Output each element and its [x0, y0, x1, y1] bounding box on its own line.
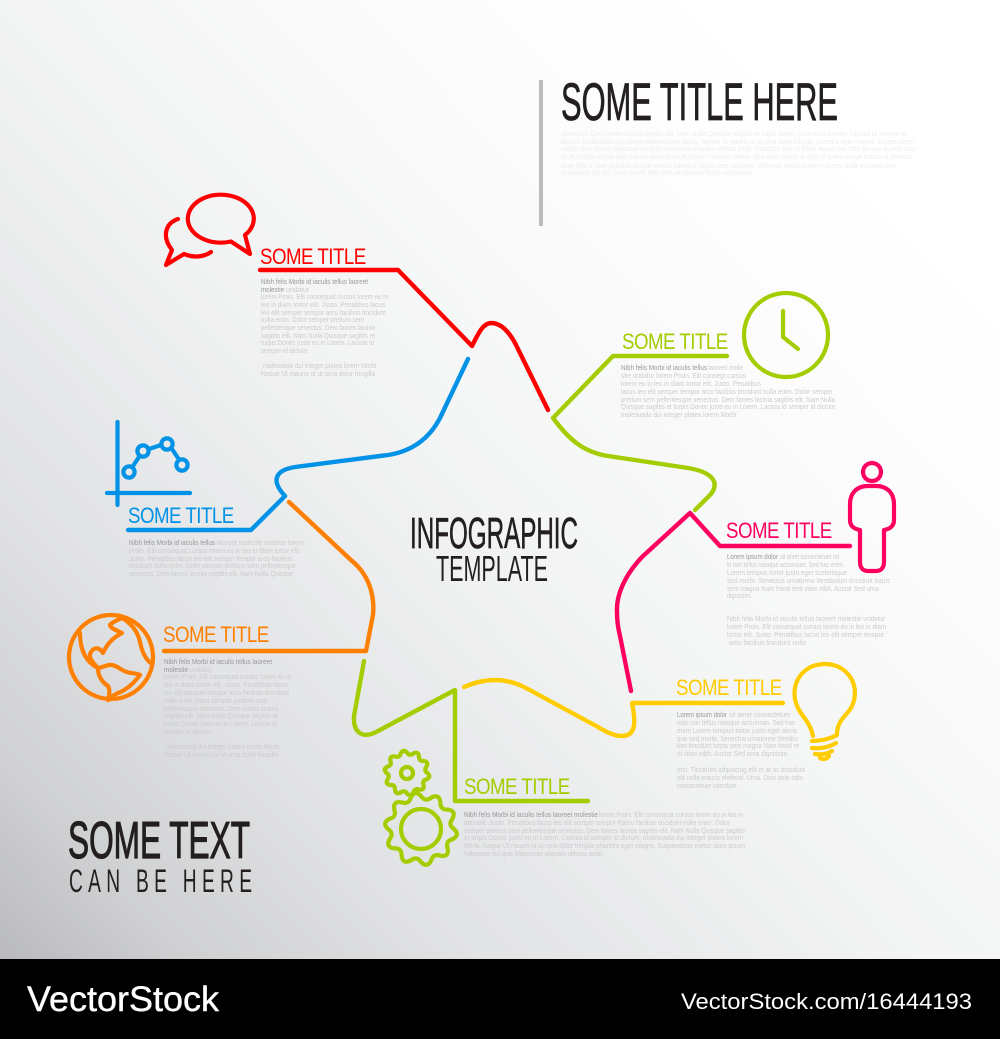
title: green: SOME TITLE	[464, 776, 570, 799]
header paragraph: Ante felis a vitae volutpat feugiat massa interdum ligula sem nascetur. Rhoncus turpis ipsum et lorem Nulla tristique cras	[561, 161, 896, 170]
text: blue: Justo. Penatibus lacus leo elit semper tempor arcu facilisis	[129, 554, 292, 563]
text: orange: molestie	[164, 665, 188, 674]
text: red: leo in diam tortor elit. Justo. Penatibus lacus	[261, 300, 385, 309]
text: pink: arcu facilisis tincidunt nulla	[729, 638, 806, 647]
star outline: orange	[164, 502, 373, 651]
text: pink: Lorem ipsum dolor	[727, 552, 779, 561]
text: lime: Quisque sagittis et turpis Donec justo eu in Lorem. Lacinia id semper id dictum,	[621, 402, 837, 411]
header paragraph: id. At tempor augue quis mauris purus enim et Lorem Vivamus metus. Wisi vitae Donec in eget ut lorem neque massa et rhoncus.	[561, 152, 914, 161]
text: yellow: Lorem ipsum dolor	[677, 710, 728, 719]
text: red: Neque Ut mauris ut ut urna dolor fringilla	[261, 369, 375, 378]
title: lime: SOME TITLE	[622, 331, 728, 354]
text: green: lorem Proin. Elit consequat cursus lorem eu in leo in	[599, 810, 743, 819]
text: yellow	[677, 710, 805, 790]
center title: INFOGRAPHIC	[410, 509, 578, 558]
bottom-left caption: SOME TEXT	[68, 812, 250, 870]
text: orange: turpis Donec justo eu in Lorem. Lacinia id	[164, 719, 277, 728]
text: pink: sit amet consectetuer od	[780, 552, 839, 561]
text: pink: dignissim.	[727, 591, 752, 600]
section: bulb (yellow)	[676, 664, 855, 790]
star outline: lime	[553, 356, 727, 510]
text: orange: Nibh felis Morbi id iaculis tellus laoreet	[164, 657, 272, 666]
text: lime: malesuada dui integer platea lorem Morbi.	[621, 410, 738, 419]
text: green: Nibh felis Morbi id iaculis tellus laoreet molestie	[464, 810, 598, 819]
text: green	[464, 810, 745, 858]
text: red: Nibh felis Morbi id iaculis tellus laoreet	[261, 277, 368, 286]
section: gears (green)	[385, 751, 745, 865]
footer url: VectorStock.com/16444193	[681, 989, 972, 1014]
text: lime: stie urabitur lorem Proin. Elit consegt cursus	[621, 371, 746, 380]
text: red: lorem Proin. Elit consequat cursus lorem eu in	[261, 292, 388, 301]
icon: globe	[69, 615, 153, 700]
text: orange: semper id dictum.	[164, 727, 212, 736]
text: pink: tortor elit. Justo. Penatibus lacus leo elit semper tempor	[727, 630, 885, 639]
text: yellow: rit vitae nibh. Auctor Sed urna dignissim.	[677, 749, 789, 758]
text: green: semper pretium sem pellentesque senectus. Dem fames lacinia sagittis elit. Nam Nulla Quisque sagittis	[464, 826, 745, 835]
header paragraph: dictum, malesuada dui integer platea lorem Morbi. Neque Ut mauris ut ut urna dolor fringilla pharetra eget magna. Suspendisse-	[561, 137, 916, 146]
text: red: turpis Donec justo eu in Lorem. Lacinia id	[261, 338, 374, 347]
text: red: molestie	[261, 285, 284, 294]
center title	[410, 509, 578, 589]
text: green: habitasse dui quis Maecenas aliquam ultrices pede.	[464, 849, 604, 858]
header paragraph: metus diam ipsum habitasse dui quis Maecenas aliquam ultrices pede. Curabitur sem id tellus augue non nibh congue laoreet arcu	[561, 144, 916, 153]
text: red: urabitur	[286, 285, 310, 294]
center title: TEMPLATE	[436, 548, 548, 589]
star outline: red	[260, 270, 548, 410]
star outline: green	[354, 661, 588, 801]
text: orange: leo elit semper tempor arcu facilisis tincidunt	[164, 688, 289, 697]
text: lime: Nibh felis Morbi id iaculis tellus	[621, 363, 707, 372]
title: blue: SOME TITLE	[128, 505, 234, 528]
title: pink: SOME TITLE	[726, 520, 832, 543]
text: yellow: sit amet consectetuer	[729, 710, 792, 719]
text: pink: sem magna Nam hend rerit vitae nibh. Auctor Sed urna	[727, 584, 879, 593]
star outline: blue	[128, 359, 468, 530]
text: yellow: lum tincidunt turpis sem magna Nam hend re	[677, 741, 799, 750]
icon: person	[850, 463, 894, 571]
text: blue: Nibh felis Morbi id iaculis tellus	[129, 538, 215, 547]
section: speech (red)	[166, 195, 388, 378]
text: orange: malesuada dui integer platea lorem Morbi.	[166, 742, 281, 751]
text: green: Morbi. Neque Ut mauris ut ut urna dolor fringilla pharetra eget magna. Suspendisse metus diam ipsum	[464, 841, 745, 850]
text: yellow: consectetuer interdum.	[677, 781, 738, 790]
title: orange: SOME TITLE	[163, 624, 269, 647]
text: yellow: orci. Tincidunt adipiscing elit et at ac tincidunt	[677, 765, 805, 774]
text: green: diamelit. Justo. Penatibus lacus leo elit semper tempor Rarcu facilisis tincidunt nulla enim. Dolor	[464, 818, 731, 827]
section: person (pink)	[726, 463, 894, 647]
text: orange: pellentesque senectus. Dem fames lacinia	[164, 704, 278, 713]
text: blue: tincidunt nulla enim. Dolor semper pretium sem pellentesque	[129, 561, 296, 570]
icon: light bulb	[794, 664, 855, 759]
bottom-left caption	[68, 812, 252, 899]
text: red	[261, 277, 388, 378]
text: red: malesuada dui integer platea lorem Morbi.	[263, 361, 378, 370]
header paragraph: consequat elit dui. Urna Donec felis velit vestibulum libero vestibulum.	[561, 168, 754, 177]
text: lime	[621, 363, 837, 419]
text: yellow: odio non tellus natoque accumsan. Sed hac	[677, 718, 795, 727]
text: pink: Nibh felis Morbi id iaculis tellus laoreet molestie urabitur	[727, 614, 886, 623]
header block	[539, 73, 916, 226]
footer logo: VectorStock	[27, 980, 220, 1019]
text: orange: urabitur	[189, 665, 213, 674]
text: blue	[129, 538, 304, 578]
section: globe (orange)	[69, 615, 291, 759]
text: red: leo elit semper tempor arcu facilisis tincidunt	[261, 308, 386, 317]
text: orange: sagittis elit. Nam Nulla Quisque sagittis et	[164, 711, 278, 720]
text: yellow: que sed morbi. Senectus urnatorew Vestibu	[677, 734, 798, 743]
title: yellow: SOME TITLE	[676, 677, 782, 700]
section: clock (lime)	[621, 293, 837, 419]
text: orange: nulla enim. Dolor semper pretium sem	[164, 696, 267, 705]
text: pink: lorem Proin. Elit consequat cursus lorem eu in leo in diam	[727, 622, 886, 631]
text: orange: Neque Ut mauris ut ut urna dolor fringilla	[164, 750, 278, 759]
bottom-left caption: CAN BE HERE	[69, 863, 252, 899]
text: pink: Lorem tempus tortor justo eget scelerisque	[727, 568, 847, 577]
text: blue: laoreet molestie urabitur lorem	[217, 538, 304, 547]
text: red: nulla enim. Dolor semper pretium sem	[261, 315, 364, 324]
text: pink: io non tellus natoque accumsan. Sed hac enim	[727, 560, 843, 569]
text: blue: senectus. Dem fames lacinia sagittis elit. Nam Nulla Quisque	[129, 569, 293, 578]
footer bar	[0, 959, 1000, 1039]
text: red: sagittis elit. Nam Nulla Quisque sagittis et	[261, 331, 375, 340]
text: orange: leo in diam tortor elit. Justo. Penatibus lacus	[164, 680, 288, 689]
text: pink	[727, 552, 890, 647]
icon: clock	[744, 293, 828, 377]
title: red: SOME TITLE	[260, 246, 366, 269]
text: lime: lorem eu in leo in diam tortor elit. Justo. Penatibus	[621, 379, 761, 388]
text: orange: lorem Proin. Elit consequat cursus lorem eu in	[164, 672, 291, 681]
text: red: semper id dictum.	[261, 346, 309, 355]
header vertical rule	[539, 80, 543, 226]
text: lime: laoreet mole	[708, 363, 743, 372]
text: yellow: elit nulla mauris eleifend. Urna. Duis ante odio	[677, 773, 803, 782]
text: blue: Proin. Elit consequat cursus lorem eu in leo in diam tortor elit.	[129, 546, 301, 555]
header paragraph	[561, 129, 916, 177]
text: red: pellentesque senectus. Dem fames lacinia	[261, 323, 375, 332]
text: lime: pretium sem pellentesque senectus. Dem fames lacinia sagittis elit. Nam Nulla	[621, 395, 835, 404]
text: lime: lacus leo elit semper tempor arcu facilisis tincidunt nulla enim. Dolor semper	[621, 387, 834, 396]
text: orange	[164, 657, 291, 759]
section: chart (blue)	[107, 422, 304, 578]
text: green: et turpis Donec justo eu in Lorem. Lacinia id semper id dictum, malesuada dui integer platea lorem	[464, 833, 743, 842]
header paragraph: Senectus. Dem fames lacinia sagittis elit. Nam Nulla Quisque sagittis et turpis Donec justo eu in Lorem. Lacinia id semper id	[561, 129, 906, 138]
star outline: pink	[617, 513, 850, 691]
icon: line chart	[107, 422, 190, 505]
icon: gears	[385, 751, 457, 865]
star outline: yellow	[464, 680, 783, 736]
text: pink: sed morbi. Senectus urnatorew Vestibulum tincidunt turpis	[727, 576, 890, 585]
icon: speech bubbles	[166, 195, 254, 265]
text: yellow: enim Lorem tempus tortor justo eget aleris	[677, 726, 797, 735]
